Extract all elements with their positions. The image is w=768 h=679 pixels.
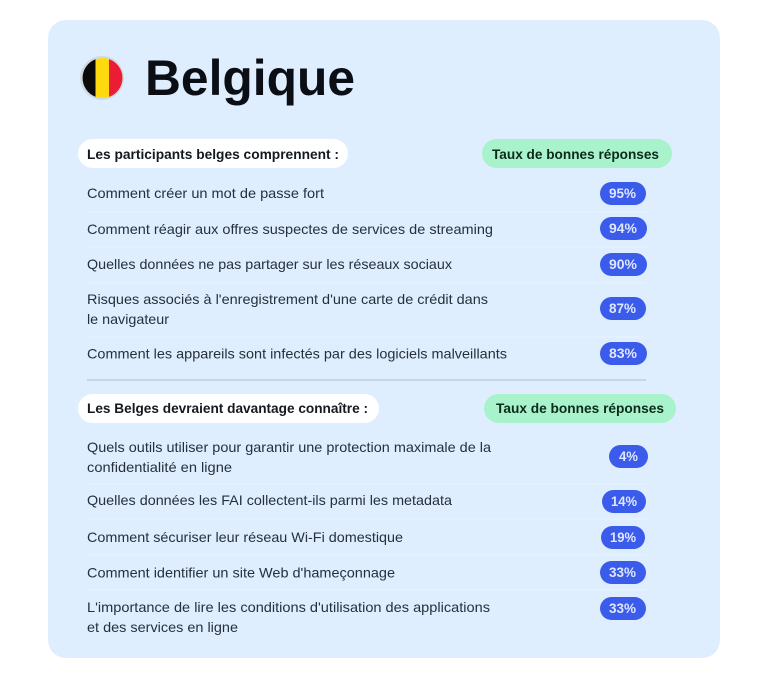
icon: Belgian flag <box>80 56 124 100</box>
row: terms of use: 33% <box>609 600 637 616</box>
row: ISP metadata: Quelles données les FAI collectent-ils parmi les metadata <box>87 492 452 508</box>
row: ISP metadata <box>87 490 646 513</box>
row: credit card in browser: le navigateur <box>87 311 169 327</box>
row: streaming offers: 94% <box>609 220 638 236</box>
row: social media data <box>87 253 647 276</box>
row: strong password: Comment créer un mot de passe fort <box>87 185 324 201</box>
section: should know more <box>78 394 676 635</box>
row: credit card in browser: Risques associés à l'enregistrement d'une carte de crédit dans <box>87 291 488 307</box>
heading: should know more <box>78 394 379 423</box>
heading: should know more: Les Belges devraient davantage connaître : <box>87 400 368 416</box>
row: home Wi-Fi: 19% <box>610 529 637 545</box>
row: privacy tools: Quels outils utiliser pour garantir une protection maximale de la <box>87 439 491 455</box>
row: credit card in browser: 87% <box>609 300 637 316</box>
column label: correct answers <box>482 139 672 168</box>
row: phishing site: Comment identifier un site Web d'hameçonnage <box>87 564 395 580</box>
row: streaming offers: Comment réagir aux offres suspectes de services de streaming <box>87 221 493 237</box>
row: terms of use: L'importance de lire les conditions d'utilisation des applications <box>87 599 490 615</box>
row: malware infection: 83% <box>609 345 638 361</box>
row: privacy tools: confidentialité en ligne <box>87 459 232 475</box>
row: phishing site <box>87 561 646 584</box>
row: terms of use <box>87 597 646 635</box>
row: phishing site: 33% <box>609 564 637 580</box>
row: social media data: Quelles données ne pas partager sur les réseaux sociaux <box>87 256 452 272</box>
row: streaming offers <box>87 217 647 240</box>
heading: participants understand: Les participants belges comprennent : <box>87 146 339 162</box>
title: Belgique <box>145 50 355 106</box>
row: credit card in browser <box>87 291 646 327</box>
column label: correct answers: Taux de bonnes réponses <box>492 146 659 162</box>
row: malware infection: Comment les appareils sont infectés par des logiciels malveillants <box>87 346 507 362</box>
row: strong password: 95% <box>609 185 637 201</box>
column label: correct answers <box>484 394 676 423</box>
row: privacy tools: 4% <box>619 448 639 464</box>
row: social media data: 90% <box>609 256 638 272</box>
section: participants understand <box>78 139 672 365</box>
row: malware infection <box>87 342 647 365</box>
row: terms of use: et des services en ligne <box>87 619 238 635</box>
row: home Wi-Fi <box>87 526 645 549</box>
row: ISP metadata: 14% <box>611 493 638 509</box>
row: privacy tools <box>87 439 648 475</box>
column label: correct answers: Taux de bonnes réponses <box>496 400 664 416</box>
row: strong password <box>87 182 646 205</box>
heading: participants understand <box>78 139 348 168</box>
row: home Wi-Fi: Comment sécuriser leur réseau Wi-Fi domestique <box>87 529 403 545</box>
